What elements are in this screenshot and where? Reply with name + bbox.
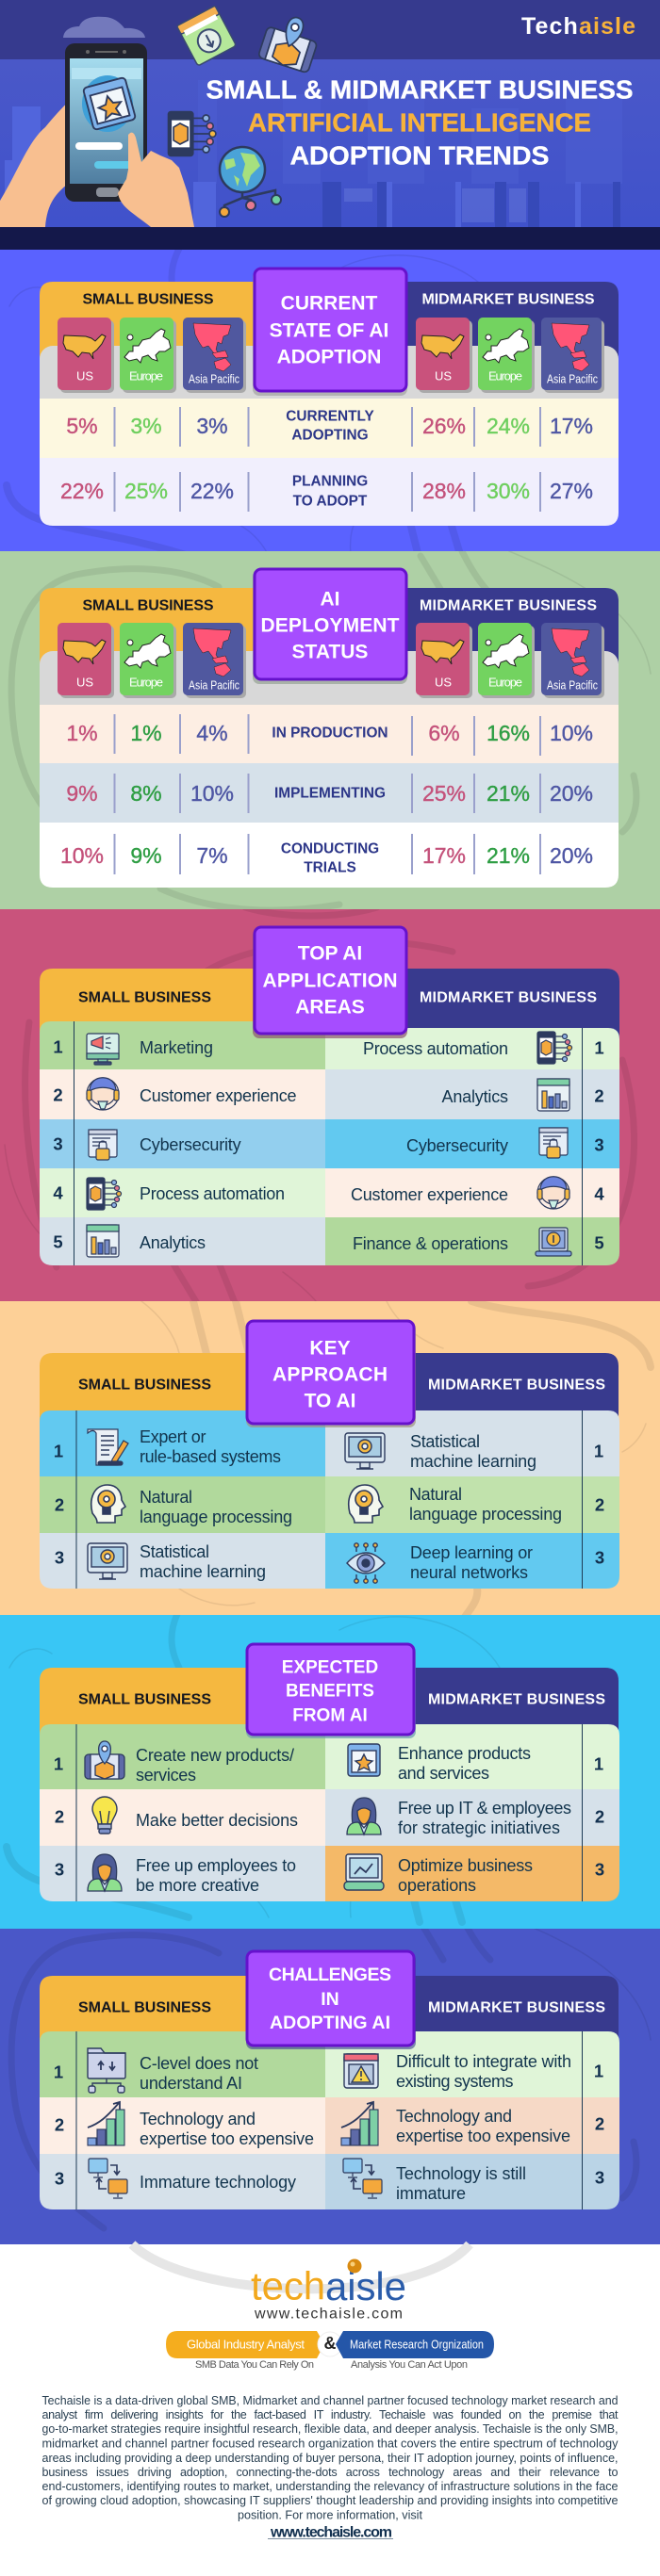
row: planning to adopt: 22% bbox=[60, 479, 104, 503]
small business ranking: Technology and bbox=[140, 2110, 256, 2128]
table: current state bbox=[40, 269, 619, 526]
region cards: small business: US bbox=[76, 675, 93, 690]
row: planning to adopt: 27% bbox=[550, 479, 593, 503]
midmarket ranking: operations bbox=[398, 1876, 476, 1895]
row: conducting trials: 20% bbox=[550, 843, 593, 868]
midmarket ranking: 3 bbox=[595, 1547, 604, 1568]
header: small business: SMALL BUSINESS bbox=[78, 989, 211, 1006]
small business ranking: C-level does not bbox=[140, 2054, 258, 2073]
midmarket ranking: and services bbox=[398, 1764, 489, 1783]
row: conducting trials: 17% bbox=[422, 843, 466, 868]
region cards: midmarket: Asia Pacific bbox=[547, 371, 598, 386]
midmarket ranking: Technology and bbox=[396, 2107, 512, 2126]
small business ranking: 1 bbox=[53, 1036, 63, 1057]
title box: ADOPTION bbox=[277, 347, 381, 367]
midmarket ranking: for strategic initiatives bbox=[398, 1818, 560, 1837]
row: conducting trials: 9% bbox=[130, 843, 162, 868]
small business ranking: 5 bbox=[53, 1232, 63, 1251]
about paragraph: end-customers, identifying routes to market, understanding the relevancy of infrastructure solutions in the face bbox=[41, 2480, 619, 2493]
row: conducting trials: TRIALS bbox=[304, 859, 356, 876]
badge: global industry analyst: SMB Data You Can Rely On bbox=[195, 2359, 314, 2371]
title box: KEY bbox=[309, 1338, 351, 1359]
region cards: midmarket bbox=[416, 623, 604, 698]
small business ranking: 3 bbox=[55, 2169, 64, 2188]
row: currently adopting: 26% bbox=[422, 414, 466, 438]
row: conducting trials: 7% bbox=[196, 843, 228, 868]
small business ranking: 3 bbox=[55, 1860, 64, 1879]
header: midmarket business: MIDMARKET BUSINESS bbox=[422, 292, 595, 307]
title: ARTIFICIAL INTELLIGENCE bbox=[248, 107, 591, 138]
small business ranking: 2 bbox=[55, 1494, 64, 1515]
illustration: phone in hands bbox=[0, 43, 194, 227]
row: planning to adopt: PLANNING bbox=[292, 473, 368, 490]
midmarket ranking: 2 bbox=[595, 2114, 604, 2133]
midmarket ranking: immature bbox=[396, 2184, 466, 2203]
small business ranking: Analytics bbox=[140, 1233, 206, 1252]
small business ranking: Cybersecurity bbox=[140, 1135, 241, 1154]
midmarket ranking: Enhance products bbox=[398, 1744, 531, 1763]
region cards: midmarket: US bbox=[435, 369, 452, 383]
title box: DEPLOYMENT bbox=[260, 614, 400, 637]
title box: ADOPTING AI bbox=[270, 2013, 390, 2033]
header: midmarket business: MIDMARKET BUSINESS bbox=[420, 989, 597, 1006]
small business ranking: 3 bbox=[53, 1134, 63, 1153]
row: currently adopting bbox=[66, 407, 593, 447]
table: deployment status bbox=[40, 569, 619, 888]
header banner bbox=[0, 0, 660, 250]
small business ranking: 2 bbox=[53, 1085, 63, 1104]
row: currently adopting: 3% bbox=[130, 414, 162, 438]
panel: challenges in adopting AI bbox=[0, 1929, 660, 2244]
midmarket ranking: Analytics bbox=[441, 1087, 508, 1106]
title box: CURRENT bbox=[281, 292, 377, 315]
small business ranking: 2 bbox=[55, 1807, 64, 1826]
footer website link: www.techaisle.com bbox=[270, 2525, 392, 2540]
row: in production: 10% bbox=[550, 721, 593, 745]
midmarket ranking: language processing bbox=[409, 1505, 562, 1524]
row: currently adopting: 5% bbox=[66, 414, 98, 438]
title box bbox=[253, 569, 407, 684]
small business ranking: 1 bbox=[54, 2062, 63, 2082]
badge: global industry analyst bbox=[166, 2331, 324, 2371]
panel: expected benefits from AI bbox=[0, 1615, 660, 1929]
midmarket ranking: 2 bbox=[595, 1807, 604, 1826]
logo: Techaisle: Techaisle bbox=[521, 13, 635, 40]
row: implementing: 20% bbox=[550, 781, 593, 806]
row: currently adopting: 3% bbox=[196, 414, 228, 438]
small business ranking: 1 bbox=[54, 1754, 63, 1773]
row: in production: 6% bbox=[428, 721, 460, 745]
midmarket ranking: expertise too expensive bbox=[396, 2127, 570, 2145]
row: planning to adopt: 28% bbox=[422, 479, 466, 503]
midmarket ranking: 3 bbox=[594, 1134, 604, 1155]
region cards: small business: US bbox=[76, 369, 93, 383]
region cards: midmarket: Asia Pacific bbox=[547, 678, 598, 692]
logo: techaisle: techaisle bbox=[251, 2263, 406, 2308]
panel: top AI application areas bbox=[0, 909, 660, 1301]
title box: IN bbox=[321, 1989, 339, 2010]
midmarket ranking: 2 bbox=[595, 1494, 604, 1515]
row: conducting trials: 10% bbox=[60, 843, 104, 868]
title box: EXPECTED bbox=[282, 1658, 378, 1677]
midmarket ranking bbox=[341, 2052, 604, 2203]
row: in production: 1% bbox=[130, 721, 162, 745]
small business ranking: Natural bbox=[140, 1488, 192, 1507]
region cards: midmarket bbox=[416, 318, 604, 393]
about paragraph: midmarket and channel partner focused research organization that covers the entire spectrum of technology bbox=[41, 2437, 619, 2450]
about paragraph: business issues driving adoption, connecting-the-dots across technology areas and their relevance to bbox=[41, 2466, 619, 2479]
midmarket ranking: Technology is still bbox=[396, 2164, 526, 2183]
midmarket ranking bbox=[345, 1432, 604, 1583]
midmarket ranking: 1 bbox=[594, 1754, 603, 1773]
region cards: midmarket: Europe bbox=[488, 369, 522, 383]
region cards: midmarket: US bbox=[435, 675, 452, 690]
small business ranking: language processing bbox=[140, 1508, 292, 1526]
small business ranking: Process automation bbox=[140, 1184, 285, 1203]
midmarket ranking: existing systems bbox=[396, 2072, 513, 2091]
row: implementing: 9% bbox=[66, 781, 98, 806]
midmarket ranking: Finance & operations bbox=[353, 1234, 508, 1253]
row: in production: 1% bbox=[66, 721, 98, 745]
title: SMALL & MIDMARKET BUSINESS bbox=[206, 75, 634, 104]
small business ranking: Free up employees to bbox=[136, 1856, 296, 1875]
title box: AREAS bbox=[295, 997, 365, 1018]
panel: AI deployment status bbox=[0, 551, 660, 909]
midmarket ranking: 5 bbox=[594, 1232, 604, 1253]
row: currently adopting: 17% bbox=[550, 414, 593, 438]
small business ranking: 3 bbox=[55, 1547, 64, 1568]
row: conducting trials: CONDUCTING bbox=[281, 840, 379, 857]
ampersand: & bbox=[324, 2334, 336, 2353]
title box: BENEFITS bbox=[286, 1681, 374, 1702]
header: small business: SMALL BUSINESS bbox=[83, 292, 214, 307]
midmarket ranking: 1 bbox=[594, 1442, 603, 1460]
title bbox=[206, 75, 634, 170]
table: key approach bbox=[40, 1321, 619, 1589]
small business ranking: 4 bbox=[53, 1183, 63, 1202]
title box bbox=[246, 1644, 416, 1738]
header: small business: SMALL BUSINESS bbox=[83, 597, 214, 614]
region cards: small business: Europe bbox=[129, 675, 163, 690]
dark band bbox=[0, 227, 660, 250]
header: small business: SMALL BUSINESS bbox=[78, 1999, 211, 2016]
about paragraph: Techaisle is a data-driven global SMB, Midmarket and channel partner focused technology market research and bbox=[41, 2394, 619, 2407]
header: small business: SMALL BUSINESS bbox=[78, 1692, 211, 1707]
icon: folder bbox=[176, 6, 237, 66]
title box bbox=[253, 927, 407, 1038]
small business ranking: machine learning bbox=[140, 1562, 266, 1581]
row: conducting trials: 21% bbox=[487, 843, 530, 868]
title box: AI bbox=[321, 588, 339, 611]
about paragraph: analyst firm delivering insights for the fact-based IT industry. Techaisle was founded on the premise that bbox=[41, 2408, 619, 2421]
header: midmarket business: MIDMARKET BUSINESS bbox=[428, 1378, 605, 1393]
row: in production: IN PRODUCTION bbox=[272, 726, 388, 741]
badge: market research organization bbox=[336, 2331, 494, 2371]
website line: www.techaisle.com bbox=[254, 2307, 403, 2322]
icon: map pin tablet bbox=[257, 9, 323, 73]
midmarket ranking: Free up IT & employees bbox=[398, 1799, 571, 1818]
small business ranking: services bbox=[136, 1766, 196, 1785]
midmarket ranking: Natural bbox=[409, 1485, 462, 1504]
about paragraph: go-to-market strategies require insightful research, flexible data, and deeper analysis. Techaisle is the only SMB, bbox=[41, 2422, 619, 2436]
row: implementing: 10% bbox=[190, 781, 234, 806]
small business ranking bbox=[54, 1427, 292, 1581]
row: implementing: 21% bbox=[487, 781, 530, 806]
small business ranking: rule-based systems bbox=[140, 1447, 281, 1466]
row: conducting trials bbox=[60, 834, 593, 876]
region cards: small business: Asia Pacific bbox=[189, 371, 239, 386]
title box: STATUS bbox=[292, 641, 368, 663]
badge: market research organization: Market Research Orgnization bbox=[350, 2337, 484, 2352]
midmarket ranking: neural networks bbox=[410, 1563, 528, 1582]
title box bbox=[246, 1951, 416, 2049]
small business ranking: Marketing bbox=[140, 1038, 213, 1057]
header: midmarket business: MIDMARKET BUSINESS bbox=[428, 1999, 605, 2016]
title box: APPROACH bbox=[272, 1364, 388, 1385]
header: midmarket business: MIDMARKET BUSINESS bbox=[428, 1692, 605, 1707]
row: planning to adopt bbox=[60, 472, 593, 512]
row: implementing: 8% bbox=[130, 781, 162, 806]
title: ADOPTION TRENDS bbox=[290, 141, 549, 170]
midmarket ranking: 3 bbox=[595, 1860, 604, 1879]
small business ranking bbox=[54, 2048, 314, 2198]
small business ranking: Create new products/ bbox=[136, 1746, 294, 1765]
header: small business: SMALL BUSINESS bbox=[78, 1378, 211, 1393]
row: planning to adopt: 30% bbox=[487, 479, 530, 503]
table: expected benefits bbox=[40, 1644, 619, 1901]
title box: APPLICATION bbox=[262, 970, 398, 991]
midmarket ranking: Customer experience bbox=[351, 1185, 508, 1204]
region cards: small business: Asia Pacific bbox=[189, 678, 239, 692]
midmarket ranking bbox=[351, 1032, 604, 1256]
small business ranking bbox=[54, 1741, 298, 1895]
region cards: midmarket: Europe bbox=[488, 675, 522, 690]
row: in production: 16% bbox=[487, 721, 530, 745]
icon: process phone bbox=[169, 112, 216, 155]
panel: key approach to AI bbox=[0, 1301, 660, 1615]
title box: STATE OF AI bbox=[270, 320, 388, 341]
title box: FROM AI bbox=[292, 1705, 368, 1726]
midmarket ranking: 3 bbox=[595, 2167, 604, 2188]
row: planning to adopt: 22% bbox=[190, 479, 234, 503]
midmarket ranking: 4 bbox=[594, 1183, 604, 1204]
small business ranking: 1 bbox=[54, 1442, 63, 1460]
midmarket ranking: machine learning bbox=[410, 1452, 536, 1471]
row: implementing: IMPLEMENTING bbox=[274, 786, 386, 801]
row: planning to adopt: TO ADOPT bbox=[293, 494, 368, 509]
header: midmarket business: MIDMARKET BUSINESS bbox=[420, 597, 597, 614]
about paragraph bbox=[41, 2394, 619, 2521]
panel: footer bbox=[0, 2244, 660, 2576]
title box: TO AI bbox=[305, 1391, 355, 1411]
midmarket ranking: 2 bbox=[594, 1085, 604, 1106]
badge: global industry analyst: Global Industry Analyst bbox=[187, 2337, 305, 2352]
row: planning to adopt: 25% bbox=[124, 479, 168, 503]
table: top AI application areas bbox=[40, 927, 619, 1265]
table: challenges bbox=[40, 1951, 619, 2209]
midmarket ranking bbox=[344, 1744, 604, 1895]
title box bbox=[246, 1321, 416, 1427]
region cards: small business bbox=[58, 623, 246, 698]
row: implementing: 25% bbox=[422, 781, 466, 806]
icon: globe network bbox=[220, 147, 281, 217]
cloud bbox=[63, 17, 145, 38]
row: in production: 4% bbox=[196, 721, 228, 745]
midmarket ranking: Statistical bbox=[410, 1432, 480, 1451]
midmarket ranking: Cybersecurity bbox=[406, 1136, 508, 1155]
title box: TOP AI bbox=[298, 942, 362, 965]
panel: current state of AI adoption bbox=[0, 250, 660, 551]
row: currently adopting: 24% bbox=[487, 414, 530, 438]
midmarket ranking: Optimize business bbox=[398, 1856, 533, 1875]
small business ranking: Customer experience bbox=[140, 1086, 296, 1105]
midmarket ranking: 1 bbox=[594, 1038, 604, 1057]
about paragraph: of growing cloud adoption, showcasing IT suppliers' thought leadership and providing insights into competitive bbox=[41, 2494, 619, 2507]
midmarket ranking: Difficult to integrate with bbox=[396, 2052, 571, 2071]
small business ranking bbox=[53, 1034, 296, 1257]
midmarket ranking: 1 bbox=[594, 2062, 603, 2080]
small business ranking: expertise too expensive bbox=[140, 2129, 314, 2148]
badge: market research organization: Analysis You Can Act Upon bbox=[351, 2359, 468, 2371]
row: currently adopting: CURRENTLY bbox=[286, 409, 374, 424]
title box: CHALLENGES bbox=[269, 1965, 391, 1985]
about paragraph: areas including providing a deep understanding of buyer persona, their IT adoption journey, points of influence, bbox=[41, 2452, 619, 2465]
small business ranking: Statistical bbox=[140, 1542, 209, 1561]
small business ranking: understand AI bbox=[140, 2074, 242, 2093]
about paragraph: position. For more information, visit bbox=[238, 2508, 422, 2521]
ampersand bbox=[318, 2332, 342, 2356]
small business ranking: Immature technology bbox=[140, 2173, 296, 2192]
row: currently adopting: ADOPTING bbox=[291, 428, 369, 443]
region cards: small business bbox=[58, 318, 246, 393]
small business ranking: be more creative bbox=[136, 1876, 259, 1895]
small business ranking: Make better decisions bbox=[136, 1811, 298, 1830]
midmarket ranking: Process automation bbox=[363, 1039, 508, 1058]
row: implementing bbox=[66, 774, 593, 813]
small business ranking: Expert or bbox=[140, 1427, 206, 1446]
midmarket ranking: Deep learning or bbox=[410, 1543, 533, 1562]
region cards: small business: Europe bbox=[129, 369, 163, 383]
small business ranking: 2 bbox=[55, 2114, 64, 2135]
title box bbox=[253, 269, 407, 396]
row: in production bbox=[66, 714, 593, 756]
